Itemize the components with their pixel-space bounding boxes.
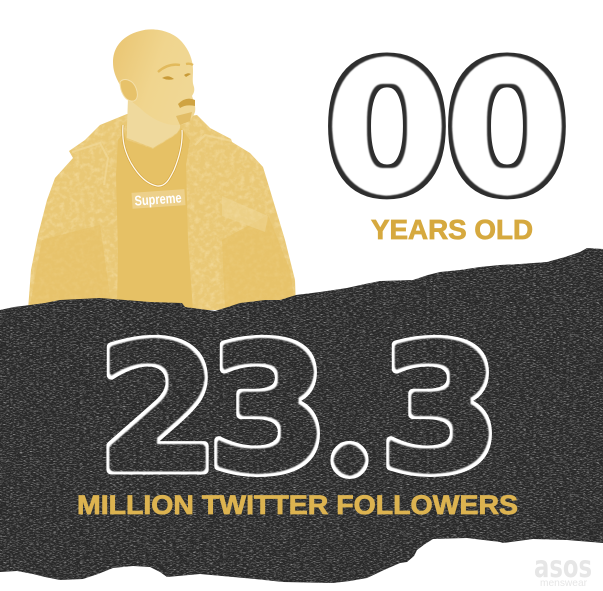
big follower figure — [97, 307, 501, 512]
big follower figure: 3 — [379, 307, 501, 512]
mouth and goatee — [178, 99, 195, 108]
neck — [127, 98, 180, 148]
gold chain necklace — [123, 125, 182, 186]
label: million twitter followers: MILLION TWITTER FOLLOWERS — [77, 490, 518, 520]
big age figure: 0 — [448, 33, 566, 226]
head — [113, 29, 195, 125]
big follower figure: 3 — [207, 307, 329, 512]
jacket — [28, 114, 296, 310]
big follower figure: 2 — [97, 307, 219, 512]
big follower figure: . — [327, 312, 372, 511]
eyes and brow — [158, 64, 193, 72]
duotone portrait: man in shearling jacket — [20, 29, 305, 315]
t-shirt — [116, 128, 193, 310]
ear — [120, 80, 137, 101]
torn dark paper panel — [0, 240, 603, 591]
big age figure: 0 — [328, 33, 446, 226]
asos menswear logo: menswear — [540, 577, 587, 589]
label: years old: YEARS OLD — [371, 214, 533, 245]
big age figure — [328, 33, 566, 226]
Supreme box logo: Supreme — [134, 189, 182, 209]
